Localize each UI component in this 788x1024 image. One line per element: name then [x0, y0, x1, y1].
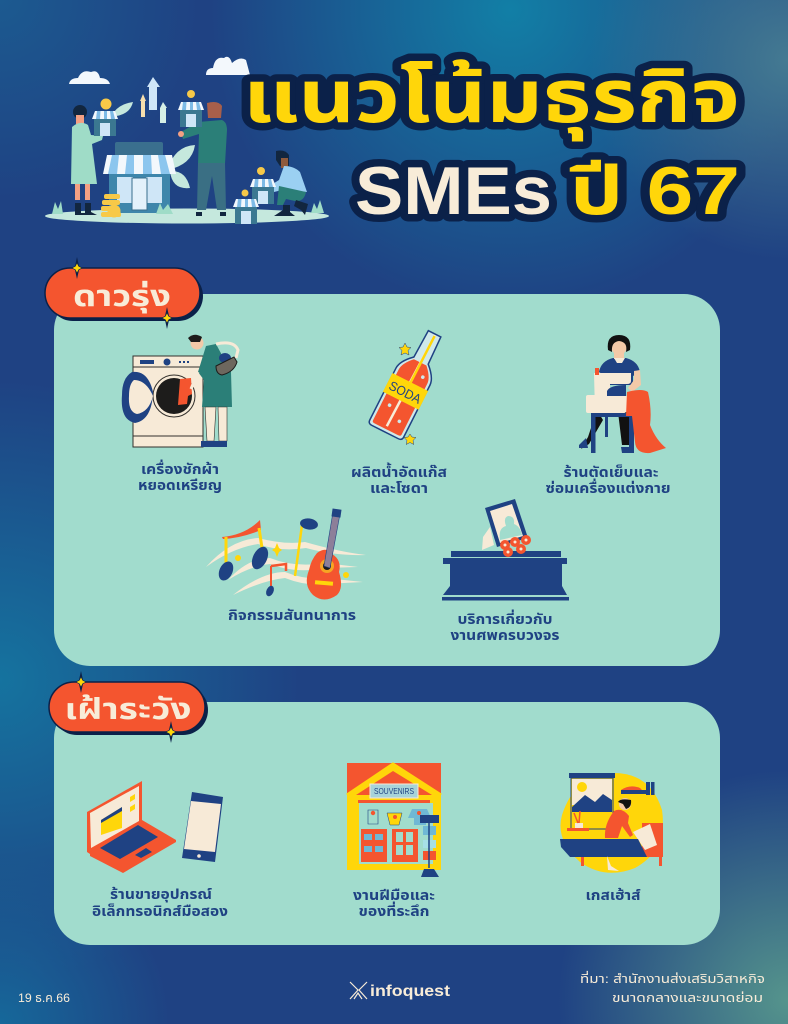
heading pill: watch out	[49, 671, 208, 743]
label: handicrafts and souvenirs: งานฝีมือและ	[353, 887, 435, 903]
label: funeral services: บริการเกี่ยวกับ	[458, 609, 552, 627]
icon: soda bottle	[367, 325, 452, 444]
heading pill: rising stars	[45, 257, 203, 329]
man standing holding shop	[178, 102, 227, 216]
title line 2: year: ปี 67	[569, 153, 740, 229]
heading pill: watch out: เฝ้าระวัง	[64, 694, 192, 726]
date: 19 ธ.ค.66	[18, 991, 70, 1005]
panel: watch out	[54, 702, 720, 945]
label: tailoring: ซ่อมเครื่องแต่งกาย	[546, 478, 670, 496]
source note: ที่มา: สำนักงานส่งเสริมวิสาหกิจ	[580, 970, 765, 986]
label: guesthouse: เกสเฮ้าส์	[586, 887, 641, 903]
label: used electronics: ร้านขายอุปกรณ์	[110, 886, 212, 903]
icon: casket with portrait and flowers	[442, 499, 569, 600]
header illustration: people with shops	[45, 57, 329, 224]
panel: rising stars	[54, 294, 720, 666]
icon: clouds	[69, 57, 250, 84]
label: handicrafts and souvenirs	[353, 887, 435, 919]
man crouching with shop	[268, 150, 308, 216]
icon: shop with coin (woman)	[92, 98, 133, 136]
label: funeral services: งานศพครบวงจร	[450, 627, 560, 643]
title line 2: SMEs: SMEs	[355, 153, 552, 229]
icon: grass	[52, 200, 324, 214]
woman holding shop	[71, 105, 103, 215]
ground	[45, 208, 329, 224]
label: tailoring: ร้านตัดเย็บและ	[564, 464, 658, 480]
icon: washing machine with woman	[122, 335, 238, 447]
icon: leaves	[167, 145, 195, 188]
label: tailoring	[546, 464, 670, 496]
label: washing machine	[138, 459, 222, 493]
icon: guesthouse room	[560, 773, 663, 873]
label: handicrafts and souvenirs: ของที่ระลึก	[358, 901, 430, 919]
icon: laptop and smartphone	[87, 781, 223, 873]
icon: shop with coin (man)	[178, 90, 204, 127]
title	[243, 55, 740, 229]
logo: infoquest: infoquest	[370, 983, 451, 1000]
title line 1: แนวโน้มธุรกิจ	[243, 55, 740, 142]
logo: infoquest	[350, 982, 451, 1000]
label: washing machine: หยอดเหรียญ	[138, 477, 222, 493]
label: soda	[351, 462, 448, 496]
label: soda: ผลิตน้ำอัดแก๊ส	[351, 462, 448, 480]
label: recreation: กิจกรรมสันทนาการ	[228, 607, 356, 623]
source note	[580, 970, 765, 1005]
label: funeral services	[450, 609, 560, 643]
icon: shop with coin (crouching man)	[250, 167, 276, 204]
heading pill: rising stars: ดาวรุ่ง	[73, 281, 171, 313]
icon: small shop on ground	[233, 190, 259, 224]
label: used electronics	[92, 886, 228, 919]
label: soda: และโซดา	[370, 480, 428, 496]
label: washing machine: เครื่องชักผ้า	[141, 459, 219, 477]
icon: growth arrows	[140, 77, 167, 123]
icon: souvenir shop	[347, 763, 441, 877]
icon: music notes and guitar	[206, 508, 366, 600]
bottle label text: SODA	[387, 378, 424, 407]
source note: ขนาดกลางและขนาดย่อม	[612, 991, 763, 1005]
icon: coins	[101, 194, 121, 218]
shop sign text: SOUVENIRS	[374, 786, 414, 796]
icon: storefront	[103, 142, 176, 213]
icon: seamstress at sewing machine	[579, 335, 666, 453]
label: used electronics: อิเล็กทรอนิกส์มือสอง	[92, 903, 228, 919]
